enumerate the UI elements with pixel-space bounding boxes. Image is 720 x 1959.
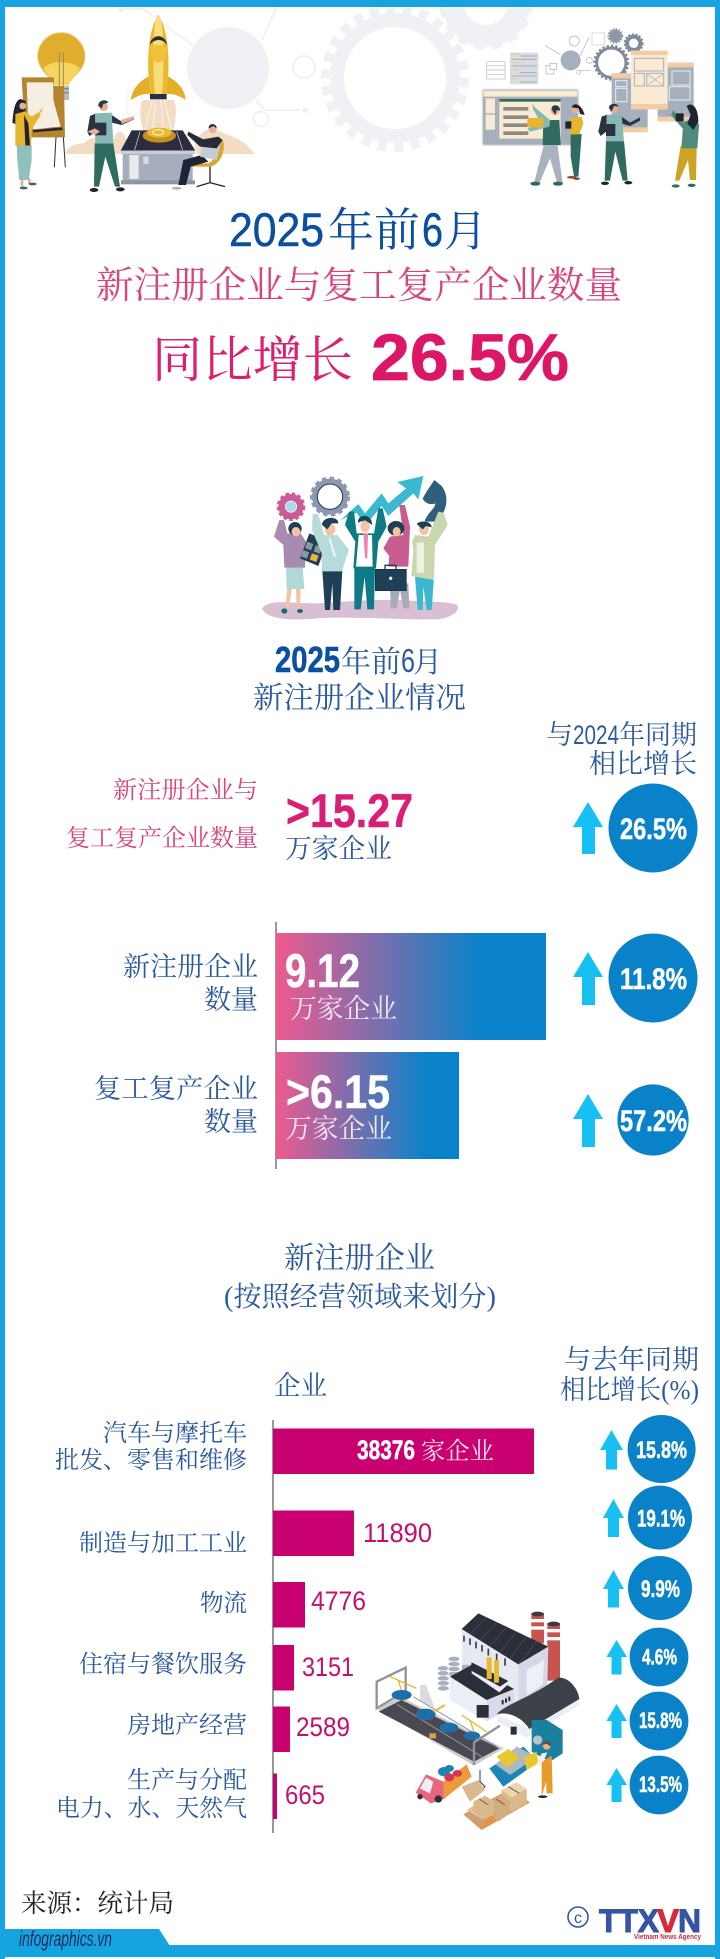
person: woman with tablet xyxy=(671,104,699,188)
title xyxy=(96,203,622,394)
person: woman in pink jacket xyxy=(383,505,410,608)
title: 6 xyxy=(422,203,443,256)
icon: growth arrow xyxy=(341,476,423,526)
industry labels: 生产与分配 xyxy=(127,1767,247,1794)
growth badge 57.2% xyxy=(617,1084,689,1156)
bar: new enterprises: 9.12 xyxy=(285,944,360,997)
TTXVN logo: N xyxy=(678,1903,701,1939)
person: presenter woman xyxy=(12,99,43,189)
section heading: 2025 new enterprises xyxy=(253,639,466,715)
badge row 6 xyxy=(606,1756,688,1814)
total value xyxy=(285,784,413,864)
bar: motor vehicles: 38376 xyxy=(357,1435,415,1465)
growth badge 26.5%: 26.5% xyxy=(620,813,687,846)
title: 年前 xyxy=(328,205,420,256)
label: resumed enterprises: 复工复产企业 xyxy=(94,1074,258,1104)
icon: calculator xyxy=(300,533,327,566)
TTXVN logo xyxy=(568,1903,702,1941)
bar: utilities xyxy=(273,1774,325,1819)
background gears and network pattern xyxy=(118,0,527,146)
title: 新注册企业与复工复产企业数量 xyxy=(96,265,622,307)
bar: new enterprises xyxy=(276,933,546,1040)
label: resumed enterprises: 数量 xyxy=(204,1107,258,1137)
growth badge 11.8% xyxy=(608,934,698,1022)
badge row 5: 15.8% xyxy=(639,1708,682,1733)
column header: compared with 2024: 相比增长 xyxy=(589,749,697,779)
lathe machine and worker xyxy=(489,1720,563,1798)
person: man with tablet xyxy=(598,104,640,185)
illustration: business team xyxy=(262,476,458,619)
chimneys xyxy=(531,1612,560,1681)
icon: pink gear xyxy=(278,494,304,519)
arched hall xyxy=(497,1678,579,1738)
silos xyxy=(437,1656,472,1691)
icon: chess knight xyxy=(423,480,446,522)
ground shadow xyxy=(262,600,458,619)
bar: motor vehicles xyxy=(273,1428,534,1474)
growth badge 57.2%: 57.2% xyxy=(620,1105,687,1138)
assembly line xyxy=(377,1668,504,1766)
pallet and boxes xyxy=(462,1770,530,1830)
icon: launch machine xyxy=(121,128,195,184)
column header: enterprises: 企业 xyxy=(274,1371,327,1401)
bar: logistics: 4776 xyxy=(311,1586,366,1616)
badge row 6: 13.5% xyxy=(639,1772,682,1797)
annex building xyxy=(450,1657,514,1722)
source note: 来源：统计局 xyxy=(21,1889,174,1918)
icon: app screen xyxy=(482,89,578,145)
total row label xyxy=(66,777,258,852)
section heading: 2025 new enterprises: 2025 xyxy=(275,639,340,680)
growth column xyxy=(600,1415,696,1814)
industry labels: 房地产经营 xyxy=(127,1712,247,1739)
title: 月 xyxy=(444,209,487,256)
website label: infographics.vn xyxy=(19,1928,112,1951)
industry labels: 汽车与摩托车 xyxy=(103,1420,247,1447)
bar: resumed enterprises: >6.15 xyxy=(286,1065,390,1118)
person: man pointing at screen xyxy=(527,104,563,186)
section heading: 2025 new enterprises: 年前 xyxy=(341,646,401,679)
arrow up xyxy=(573,802,603,854)
icon: network nodes and gears xyxy=(545,29,643,79)
main building xyxy=(462,1613,548,1708)
title: 2025 xyxy=(229,203,324,256)
bar: motor vehicles: 家企业 xyxy=(421,1438,494,1465)
total value: 万家企业 xyxy=(285,834,392,864)
industry bar chart xyxy=(273,1420,534,1833)
person: man in teal suit xyxy=(345,508,387,609)
badge row 4 xyxy=(606,1628,688,1686)
bar: real estate: 2589 xyxy=(296,1712,350,1742)
title: 同比增长 xyxy=(152,332,353,388)
person: woman with notebook xyxy=(565,104,585,180)
industry labels: 物流 xyxy=(200,1590,247,1617)
bar: real estate xyxy=(273,1706,350,1752)
TTXVN logo: TTX xyxy=(599,1903,660,1939)
badge row 5 xyxy=(606,1692,688,1750)
badge row 3: 9.9% xyxy=(641,1576,680,1603)
label: new enterprises xyxy=(123,952,258,1015)
person: man in sage coat xyxy=(411,512,448,610)
section heading: 2025 new enterprises: 新注册企业情况 xyxy=(253,681,466,715)
column header: compared with last year: 与去年同期 xyxy=(564,1345,699,1375)
TTXVN logo: Vietnam News Agency xyxy=(634,1932,702,1941)
section heading: by business field xyxy=(224,1242,496,1313)
bar: manufacturing xyxy=(273,1510,432,1556)
growth badge 11.8%: 11.8% xyxy=(620,963,687,996)
person: man in light shirt xyxy=(312,514,349,610)
icon: code documents xyxy=(487,53,538,84)
industry labels: 电力、水、天然气 xyxy=(56,1795,247,1822)
bar: resumed enterprises: 万家企业 xyxy=(285,1114,392,1144)
total row label: 新注册企业与 xyxy=(113,777,258,804)
icon: light bulb xyxy=(38,33,85,103)
total value: >15.27 xyxy=(286,784,413,837)
section heading: by business field: 新注册企业 xyxy=(284,1242,435,1275)
column header: compared with 2024 xyxy=(546,720,697,779)
column header: compared with 2024: 与 xyxy=(546,720,573,750)
total row label: 复工复产企业数量 xyxy=(66,825,258,852)
bar: new enterprises: 万家企业 xyxy=(290,994,397,1024)
delivery truck xyxy=(416,1764,472,1803)
bar: manufacturing: 11890 xyxy=(363,1518,432,1548)
label: new enterprises: 新注册企业 xyxy=(123,952,258,982)
growth badge 26.5% xyxy=(608,784,698,872)
TTXVN logo: V xyxy=(657,1903,680,1939)
badge row 2 xyxy=(603,1486,692,1550)
badge row 4: 4.6% xyxy=(642,1644,677,1670)
person: man with tablet xyxy=(87,100,134,192)
badge row 1 xyxy=(600,1415,696,1483)
arrow up xyxy=(573,1094,603,1147)
bar chart: new and resumed enterprises xyxy=(276,922,546,1169)
TTXVN logo: c xyxy=(574,1910,582,1927)
icon: briefcase xyxy=(375,565,406,591)
icon: easel board xyxy=(22,77,65,167)
industry labels xyxy=(55,1420,247,1822)
column header: compared with 2024: 2024 xyxy=(573,720,619,750)
icon: grey gear xyxy=(312,479,348,515)
badge row 2: 19.1% xyxy=(637,1506,685,1532)
bar: accommodation: 3151 xyxy=(302,1652,354,1682)
column header: compared with last year: 相比增长(%) xyxy=(560,1375,699,1405)
column header: compared with last year xyxy=(560,1345,699,1405)
bar: accommodation xyxy=(273,1645,354,1690)
illustration: rocket launch team xyxy=(12,14,255,192)
column header: compared with 2024: 年同期 xyxy=(619,720,697,750)
person: seated woman on chair xyxy=(172,124,225,190)
section heading: by business field: (按照经营领域来划分) xyxy=(224,1281,496,1313)
industry labels: 批发、零售和维修 xyxy=(55,1447,247,1474)
badge row 1: 15.8% xyxy=(636,1437,687,1464)
illustration: isometric factory xyxy=(377,1612,579,1830)
bar: utilities: 665 xyxy=(285,1780,325,1810)
icon: rocket xyxy=(131,14,186,132)
label: resumed enterprises xyxy=(94,1074,258,1137)
badge row 3 xyxy=(603,1556,692,1620)
section heading: 2025 new enterprises: 月 xyxy=(413,647,442,679)
industry labels: 住宿与餐饮服务 xyxy=(79,1651,247,1678)
title: 26.5% xyxy=(371,320,569,394)
industry labels: 制造与加工工业 xyxy=(79,1530,247,1557)
smoke clouds xyxy=(65,129,255,154)
label: new enterprises: 数量 xyxy=(204,985,258,1015)
bar: resumed enterprises xyxy=(276,1052,459,1159)
arrow up xyxy=(573,952,603,1005)
bar: logistics xyxy=(273,1582,366,1628)
wireframe panels xyxy=(612,51,694,132)
person: woman with gear xyxy=(274,520,306,614)
illustration: product design team xyxy=(482,29,699,188)
section heading: 2025 new enterprises: 6 xyxy=(401,642,415,679)
